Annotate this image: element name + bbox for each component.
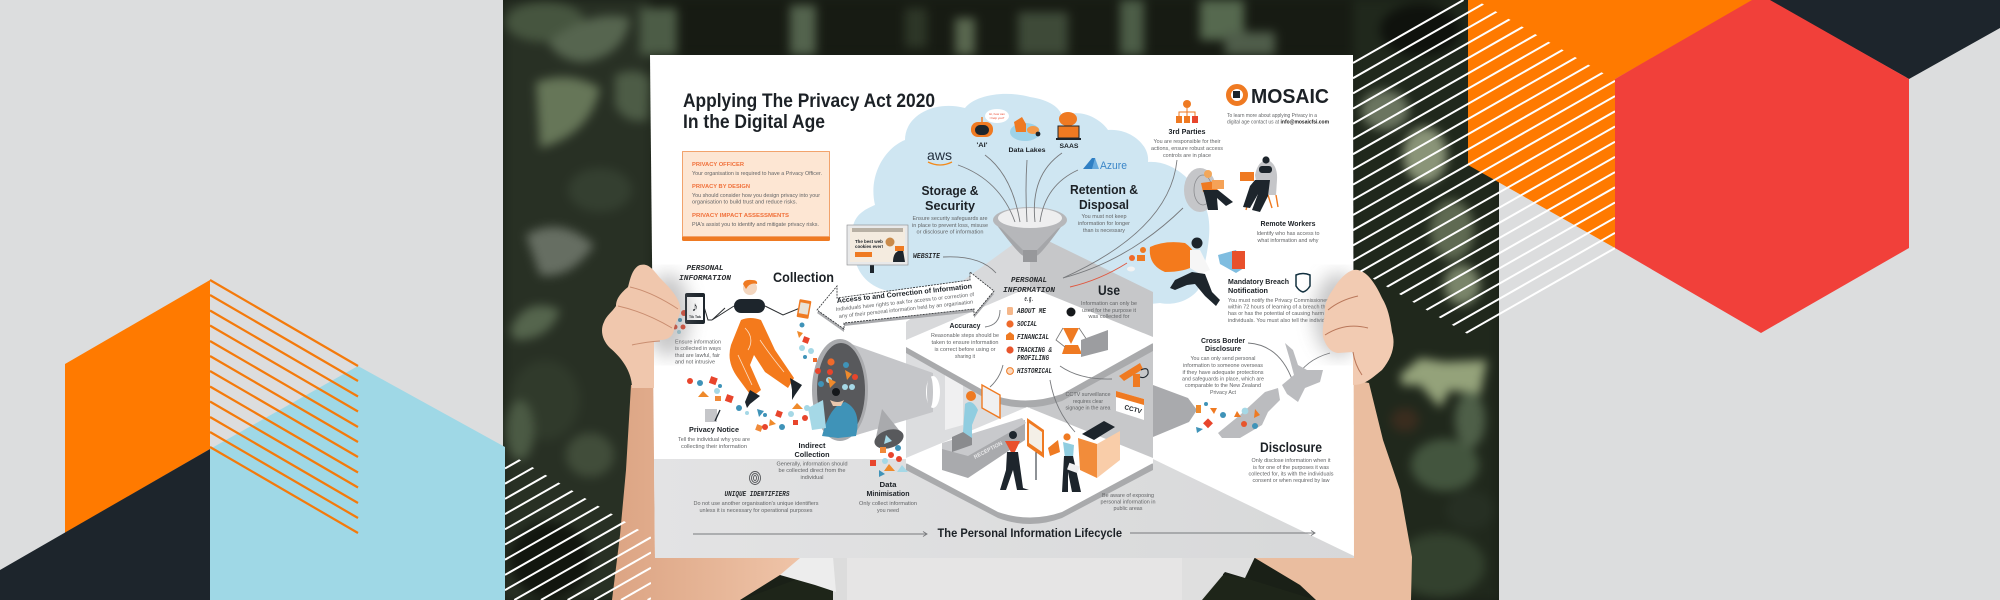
sign on wall [982, 385, 1000, 418]
monitor [952, 428, 972, 452]
confetti: disclosure [1196, 402, 1260, 433]
icon: website monitor [847, 225, 908, 273]
text: unique identifiers: Do not use another organisation's unique identifiers [694, 501, 819, 507]
icon: saas [1056, 112, 1081, 150]
reception label: RECEPTION [973, 441, 1004, 461]
shoes [745, 378, 802, 408]
text: cctv: CCTV surveillance [1066, 392, 1110, 398]
text: accuracy: taken to ensure information [932, 340, 998, 346]
panel: privacy callout: organisation to build trust and reduce risks. [692, 200, 797, 206]
upper floor [906, 287, 1153, 400]
lower left wall [906, 340, 1030, 460]
text: disclosure: Disclosure [1260, 440, 1322, 455]
label: website: WEBSITE [913, 253, 940, 261]
text: accuracy: is correct before using or [934, 347, 996, 353]
text: personal information list: INFORMATION [1003, 287, 1056, 295]
text: personal information list: SOCIAL [1017, 321, 1037, 329]
icon: second phone [797, 299, 811, 319]
panel: privacy callout: PRIVACY BY DESIGN [692, 184, 750, 190]
upper floor edge [906, 294, 1153, 408]
body [1190, 250, 1210, 274]
panel: privacy callout: You should consider how you design privacy into your [692, 193, 820, 199]
text: cctv: signage in the area [1066, 406, 1110, 412]
text: personal information list: TRACKING & [1017, 347, 1052, 355]
text: unique identifiers: unless it is necessary for operational purposes [700, 508, 813, 514]
confetti: collection stream [672, 310, 817, 432]
heading: retention and disposal: You must not keep [1082, 214, 1126, 220]
orange face [1468, 0, 1754, 248]
text: indirect collection: be collected direct from the [778, 468, 846, 474]
text: use: was collected for [1087, 314, 1130, 320]
icon: data lakes [1008, 117, 1046, 154]
lower floor [906, 407, 1153, 518]
text: cross border disclosure: if they have adequate protections [1182, 370, 1264, 376]
arrow: access and correction of information: Individuals have rights to ask for access to or correction of [836, 292, 975, 313]
icon: fingerprint [750, 472, 760, 484]
icon: financial [1006, 332, 1014, 340]
text: indirect collection: individual [800, 475, 824, 481]
text: privacy notice [678, 427, 750, 450]
panel: privacy callout: Your organisation is required to have a Privacy Officer. [692, 171, 822, 177]
icon: data lakes: Data Lakes [1008, 147, 1046, 154]
counter top [942, 418, 1026, 456]
icon: ai robot: I help you? [990, 116, 1005, 120]
small funnel cone: data minimisation [872, 409, 906, 452]
arms [702, 300, 800, 320]
icon: tracking [1006, 346, 1014, 354]
lower floor edge [906, 414, 1153, 524]
title: Applying The Privacy Act 2020 [683, 91, 935, 112]
text: mandatory breach: individuals. You must also tell the individual [1228, 318, 1332, 324]
text: remote workers: Identify who has access to [1256, 231, 1320, 237]
figure: person collecting data [685, 280, 811, 408]
text: third parties: You are responsible for their [1154, 139, 1221, 145]
icon: about me [1007, 307, 1013, 315]
text: mandatory breach: Mandatory Breach [1228, 279, 1289, 286]
figure: visitor [1000, 418, 1044, 490]
icon: aws: aws [927, 147, 952, 163]
text: ensure information: Ensure information [675, 340, 721, 346]
heading: storage and security: in place to prevent loss, misuse [912, 223, 988, 229]
text: data minimisation: Only collect information [859, 501, 917, 507]
text: public areas [1100, 493, 1156, 512]
text: personal information list: e.g. [1024, 296, 1034, 304]
text: indirect collection: Collection [794, 452, 830, 459]
text: accuracy [931, 323, 999, 360]
text: cctv [1066, 392, 1110, 412]
heading: storage and security: or disclosure of information [916, 230, 984, 236]
text: indirect collection: Indirect [798, 443, 826, 450]
decorative hexagon: left cluster [0, 280, 505, 600]
worker one [1184, 168, 1233, 212]
upper back-left wall [906, 232, 1030, 342]
text: indirect collection [776, 443, 848, 481]
text: ensure information: that are lawful, fair [675, 353, 720, 359]
text: cross border disclosure [1182, 338, 1264, 396]
icon: ai robot: Hi, how can [989, 112, 1005, 116]
text: privacy notice: collecting their information [681, 444, 747, 450]
heading: storage and security: Storage & [922, 184, 978, 198]
disclosure megaphone beam [1153, 385, 1197, 437]
confetti in megaphone [815, 358, 858, 390]
text: mandatory breach: Notification [1228, 288, 1268, 295]
text: data minimisation: Data [880, 482, 897, 489]
text: use: Information can only be [1081, 301, 1137, 307]
heading: storage and security: Security [925, 199, 975, 213]
photo: left hand [602, 265, 680, 388]
photo: right arm [1255, 380, 1412, 600]
text: cross border disclosure: Disclosure [1205, 346, 1241, 353]
heading: storage and security [912, 184, 988, 236]
text: remote workers: Remote Workers [1260, 221, 1316, 228]
icon: tiktok phone: ♪ [692, 299, 698, 314]
text: use: Use [1098, 283, 1120, 298]
text: mandatory breach: has or has the potential of causing harm to [1228, 311, 1330, 317]
decorative white hatch: left [505, 459, 651, 600]
arrows from funnel to cloud services [943, 153, 1330, 432]
text: cross border disclosure: comparable to the New Zealand [1185, 383, 1261, 389]
text: unique identifiers [694, 491, 819, 514]
text: personal information list: PERSONAL [1011, 277, 1047, 285]
text: cross border disclosure: information to someone overseas [1183, 363, 1263, 369]
heading: retention and disposal: than is necessary [1083, 228, 1125, 234]
text: use [1081, 283, 1137, 320]
text: cross border disclosure: Privacy Act [1210, 390, 1236, 396]
worker two [1240, 156, 1278, 212]
orange face [65, 280, 210, 533]
text: accuracy: Accuracy [950, 323, 981, 330]
figure: staff at copier [1048, 421, 1120, 492]
text: indirect collection: Generally, information should [776, 462, 848, 468]
text: personal information, collection side: PERSONAL [686, 265, 724, 273]
cloud: storage and retention [853, 94, 1209, 320]
lifecycle label and arrows [693, 526, 1315, 540]
photo: model's shirt [741, 555, 1316, 600]
decorative white hatch: right [1353, 0, 1615, 334]
text: accuracy: sharing it [955, 354, 975, 360]
text: personal information list: FINANCIAL [1017, 334, 1049, 342]
text: third parties [1151, 129, 1223, 159]
cctv warning sign [1116, 391, 1144, 420]
right foliage [1380, 4, 1460, 56]
text: ensure information: is collected in ways [675, 346, 721, 352]
text: data minimisation: you need [877, 508, 899, 514]
title: In the Digital Age [683, 112, 825, 133]
red hexagon [1615, 0, 1909, 333]
text: contact [1227, 113, 1329, 126]
text: disclosure: Only disclose information when it [1252, 458, 1331, 464]
icon: social [1006, 320, 1014, 328]
loot [1129, 255, 1135, 261]
decorative hexagon: right cluster [1468, 0, 2000, 333]
icon: azure [1083, 158, 1127, 172]
text: third parties: controls are in place [1163, 153, 1211, 159]
text: unique identifiers: UNIQUE IDENTIFIERS [724, 491, 790, 499]
confetti: data minimisation stream [870, 445, 908, 477]
text: mandatory breach: within 72 hours of learning of a breach that [1227, 304, 1330, 310]
arrow: access and correction of information: any of their personal information held by an organisation [839, 299, 973, 320]
text: contact: To learn more about applying Privacy in a [1227, 113, 1317, 119]
text: personal information, collection side: INFORMATION [679, 275, 732, 283]
wall window [945, 367, 963, 430]
figure: remote workers [1184, 156, 1278, 212]
icon: privacy notice [705, 409, 720, 422]
text: disclosure: collected for, its with the individuals [1248, 472, 1334, 478]
heading: retention and disposal: Retention & [1070, 183, 1138, 197]
text: privacy notice: Privacy Notice [689, 427, 739, 434]
legs [1170, 272, 1220, 306]
light blue face [210, 366, 505, 600]
icon: third parties [1176, 100, 1198, 123]
text: personal information list: ABOUT ME [1016, 308, 1046, 316]
text: ensure information [675, 340, 721, 366]
heading: collection: Collection [773, 270, 834, 285]
text: personal information list: HISTORICAL [1017, 368, 1052, 376]
text: cross border disclosure: and safeguards in place, which are [1182, 376, 1264, 382]
heading: retention and disposal [1070, 183, 1138, 234]
orange hatch lines [210, 280, 358, 533]
text: remote workers [1256, 221, 1320, 244]
text: ensure information: and not intrusive [675, 360, 715, 366]
heading: retention and disposal: information for longer [1078, 221, 1130, 227]
photo: left arm [612, 385, 800, 600]
isometric building [906, 232, 1153, 524]
map: new zealand [1196, 343, 1323, 438]
text: privacy notice: Tell the individual why you are [678, 437, 750, 443]
icon: azure: Azure [1100, 160, 1127, 172]
panel: privacy callout [682, 151, 830, 241]
title [683, 91, 935, 133]
heading: retention and disposal: Disposal [1079, 198, 1129, 212]
hand shadows on poster [646, 273, 1362, 357]
person in megaphone [808, 388, 858, 438]
top strip streaks [650, 0, 1353, 55]
text: public areas: Be aware of exposing [1102, 493, 1154, 499]
icon: cctv camera [1119, 363, 1148, 387]
logo: mosaic: MOSAIC [1251, 86, 1329, 108]
icon: shield [1296, 274, 1310, 292]
upper back-right wall [1030, 232, 1153, 340]
text: personal information, collection side [679, 265, 732, 283]
signpost [1027, 418, 1044, 480]
text: cross border disclosure: Cross Border [1201, 338, 1245, 345]
text: disclosure: is for one of the purposes it was [1253, 465, 1329, 471]
text: third parties: actions, ensure robust access [1151, 146, 1223, 152]
bag [1150, 242, 1196, 272]
text: data minimisation [859, 482, 917, 514]
panel: privacy callout: PRIVACY OFFICER [692, 162, 744, 168]
megaphone: indirect collection [808, 339, 940, 441]
text: mandatory breach [1227, 279, 1332, 324]
text: accuracy: Reasonable steps should be [931, 333, 999, 339]
photo: right hand [1323, 270, 1394, 385]
text: public areas: personal information in [1100, 500, 1156, 506]
panel: privacy callout: PRIVACY IMPACT ASSESSMENTS [692, 213, 789, 219]
icon: funnel [993, 207, 1067, 262]
poster sheet [650, 55, 1354, 558]
head [1192, 238, 1202, 248]
dark navy face [1769, 0, 2000, 79]
figure: reception desk [942, 385, 1026, 478]
icon: ai robot [971, 109, 1009, 149]
lifecycle label and arrows: The Personal Information Lifecycle [938, 526, 1122, 540]
lower right wall [1030, 340, 1153, 460]
text: third parties: 3rd Parties [1168, 129, 1206, 136]
arrow: access and correction of information: Access to and Correction of Information [836, 283, 972, 305]
text: cross border disclosure: You can only send personal [1190, 356, 1256, 362]
trouser swirl [738, 328, 784, 385]
photo: foliage backdrop [503, 0, 1499, 600]
dark navy face [0, 449, 210, 600]
icon: tiktok phone: Tik Tok [689, 315, 701, 319]
copier [1078, 421, 1120, 478]
counter [942, 420, 1025, 478]
cctv warning sign: CCTV [1123, 404, 1143, 416]
torso [734, 299, 765, 313]
icon: ai robot: 'AI' [976, 142, 988, 149]
ground band [654, 459, 1354, 558]
panel: privacy callout: PIA's assist you to identify and mitigate privacy risks. [692, 222, 819, 228]
icon: website monitor: cookies ever! [855, 244, 884, 249]
icon: historical [1007, 368, 1013, 374]
head [743, 281, 757, 295]
orange trousers [730, 318, 794, 397]
text: use: used for the purpose it [1082, 308, 1137, 314]
text: personal information list [1003, 277, 1056, 376]
figure: desk worker [1056, 308, 1108, 357]
text: data minimisation: Minimisation [866, 491, 910, 498]
text: mandatory breach: You must notify the Privacy Commissioner [1228, 298, 1328, 304]
folder [1218, 250, 1244, 273]
text: contact: digital age contact us at info@mosaicfsi.com [1227, 120, 1329, 126]
icon: website monitor: The best web [855, 239, 883, 244]
icon: tiktok phone [685, 293, 705, 324]
text: disclosure: consent or when required by law [1252, 478, 1330, 484]
text: remote workers: what information and why [1257, 238, 1319, 244]
icon: saas: SAAS [1060, 143, 1079, 150]
figure: thief with bag [1127, 238, 1245, 306]
hair [743, 280, 757, 289]
text: public areas: public areas [1114, 506, 1143, 512]
text: disclosure [1248, 440, 1334, 484]
receptionist [963, 391, 978, 438]
text: personal information list: PROFILING [1017, 355, 1049, 363]
arrow: access and correction of information [817, 272, 994, 332]
text: cctv: requires clear [1073, 399, 1103, 405]
heading: storage and security: Ensure security safeguards are [912, 216, 988, 222]
